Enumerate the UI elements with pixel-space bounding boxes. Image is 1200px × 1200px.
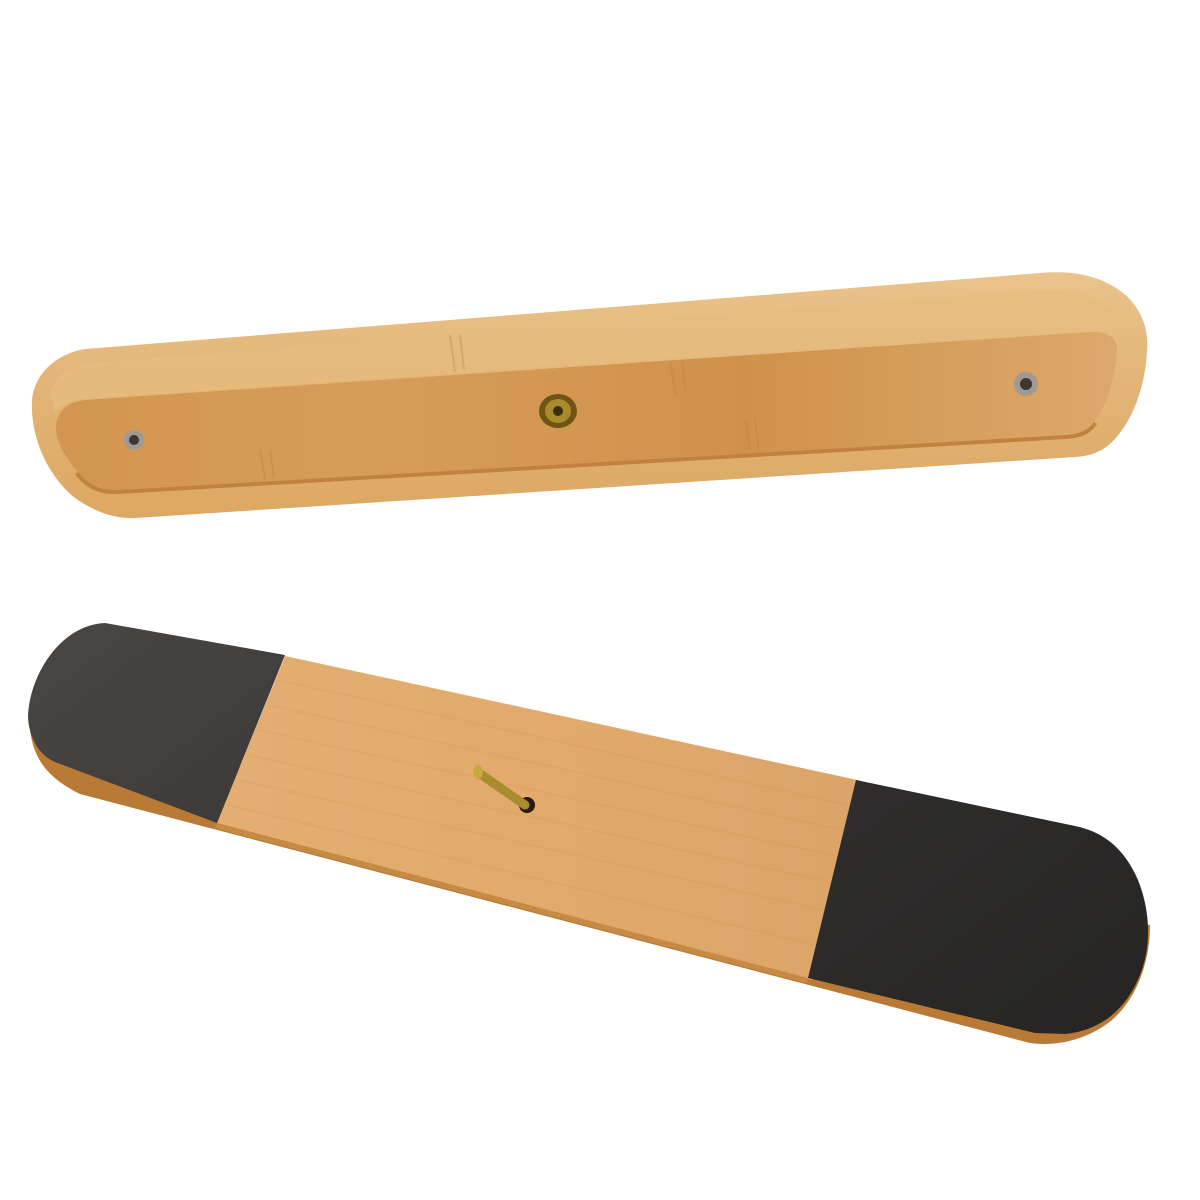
brass screw pin: [473, 765, 535, 813]
left insert nut: [124, 430, 144, 450]
top board upper bevel: [50, 290, 1128, 412]
bottom board edge: [30, 730, 1150, 1044]
bamboo knuckle marks: [260, 335, 759, 480]
centre brass screw: [539, 394, 577, 428]
lower bamboo strip: [214, 823, 808, 983]
bottom board: flat bamboo with rubber pads: [28, 623, 1150, 1044]
plank grain: [228, 680, 848, 945]
top board outer rim: [32, 272, 1147, 518]
right insert nut: [1014, 372, 1038, 396]
bamboo middle plank: [217, 656, 862, 980]
left rubber pad: [28, 623, 285, 823]
top board recess: [56, 332, 1117, 490]
recess lower edge shadow: [75, 422, 1097, 494]
top board: recessed bamboo tray: [32, 272, 1147, 518]
right rubber pad: [808, 780, 1148, 1034]
